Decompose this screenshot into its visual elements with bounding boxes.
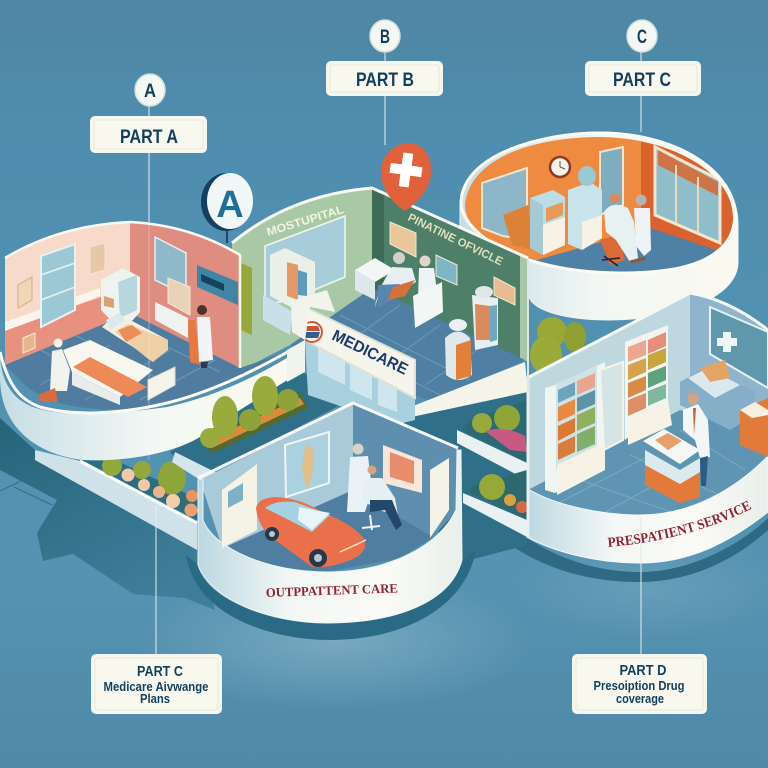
icon: letter A badge (201, 173, 253, 243)
floor (528, 410, 768, 515)
outer white wall band (460, 132, 738, 320)
pictures (18, 243, 105, 353)
back bed (102, 313, 168, 362)
leader line: part D (640, 517, 642, 563)
panel: Part C room (460, 130, 741, 320)
label: Part D: Presoiption Drug (594, 678, 685, 693)
label: Part B (327, 62, 442, 95)
orange drawers (740, 398, 768, 457)
doctor and patient (347, 444, 402, 530)
right wall window (155, 237, 186, 295)
leader line: part A (148, 102, 150, 222)
window with cross (710, 307, 768, 388)
bed/desk (680, 360, 755, 430)
medicine bottle (445, 319, 472, 380)
nurse (38, 338, 70, 402)
top rim (232, 188, 528, 258)
planter: right lower (463, 470, 528, 537)
badge: C (627, 20, 657, 52)
outer shadow (186, 550, 476, 640)
doctor with iv stand (188, 305, 213, 368)
label: Part C Medicare Advantage: PART C (137, 663, 183, 680)
shelf unit (101, 268, 140, 332)
front white wall (407, 362, 528, 418)
leader line: part A through room (148, 222, 150, 460)
leader line: part C lower (155, 505, 157, 655)
icon: letter A badge: A (216, 184, 244, 226)
front bed (63, 340, 175, 405)
ground bed: dark teal area between rooms (170, 372, 527, 562)
left wall (5, 222, 130, 365)
left window (41, 244, 75, 327)
sign text hospital: MOSTUPITAL (265, 204, 345, 239)
shelf unit right (625, 325, 672, 445)
label: Part C Medicare Advantage (92, 655, 221, 713)
pillar (291, 290, 335, 340)
storefront (305, 340, 415, 425)
medicine bottle large cabinet (472, 286, 498, 350)
room label: OUTPPATTENT CARE (266, 580, 398, 600)
planter: central garden (200, 376, 308, 453)
room label: PRESPATIENT SERVICE (608, 500, 752, 547)
inner room (465, 137, 734, 272)
cabinet 1 (530, 190, 565, 255)
front band (0, 350, 300, 460)
label: Part D (573, 655, 706, 713)
leader line: part B (384, 50, 386, 145)
wall edge and rim (5, 222, 240, 368)
planter: lower left strip (35, 450, 200, 550)
door (600, 362, 623, 450)
car (256, 497, 366, 567)
left green wall (232, 188, 372, 375)
wall monitor (168, 278, 190, 315)
label: Part C Medicare Advantage: Medicare Aivwange (104, 679, 208, 694)
left window (482, 168, 527, 240)
medicare logo (302, 322, 322, 342)
icon: orange plus pin (381, 143, 431, 211)
side table (155, 302, 188, 338)
label: Part A: PART A (120, 127, 178, 148)
label: Part C (586, 62, 700, 95)
bush: pharmacy back (530, 317, 586, 374)
label: Part D: PART D (620, 662, 667, 679)
walls top rim (527, 293, 768, 378)
cabinet 2 (568, 166, 602, 250)
white curb (172, 452, 217, 480)
sign text office: PINATINE OFVICLE (406, 212, 505, 268)
badge: B: B (380, 27, 390, 48)
white band (198, 450, 462, 623)
cabinet (263, 248, 315, 335)
floor (290, 288, 525, 402)
right wall (353, 403, 458, 538)
band toward central room (287, 340, 305, 382)
right window (655, 147, 720, 243)
chart on wall (383, 445, 422, 493)
planter: right upper (457, 400, 527, 480)
wall pictures (390, 222, 515, 305)
window behind cabinets (600, 147, 623, 215)
leader line: part C (640, 50, 642, 132)
desk and seated people (355, 252, 443, 328)
door (222, 464, 257, 548)
label: Part C: PART C (613, 70, 671, 91)
window left wall (265, 216, 345, 305)
left wall (200, 403, 353, 550)
label: Part B: PART B (356, 70, 414, 91)
label: Part D: coverage (616, 691, 664, 706)
badge: A (135, 74, 165, 106)
floor (5, 313, 287, 409)
left wall (527, 293, 690, 505)
label: Part C Medicare Advantage: Plans (140, 691, 170, 706)
orange horse picture (503, 205, 534, 250)
panel: prescription service room (526, 294, 768, 564)
shelf unit left (545, 362, 605, 495)
label: Part A (91, 117, 206, 152)
right wall (130, 222, 240, 368)
rim (461, 133, 736, 273)
panel: Part A hospital room (0, 222, 305, 460)
counter (643, 429, 700, 503)
badge: A: A (144, 81, 156, 102)
right green wall (372, 188, 528, 362)
pharmacist (683, 390, 710, 486)
medicare sign: MEDICARE (329, 327, 411, 379)
bush strip: tall hedge (241, 263, 252, 335)
blue sign (197, 265, 238, 305)
badge: B (370, 20, 400, 52)
right wall (690, 293, 768, 460)
panel: outpatient care room (186, 403, 476, 640)
medicare sign (302, 307, 415, 398)
badge: C: C (637, 27, 647, 48)
clock (550, 157, 570, 177)
window with spine picture (285, 432, 329, 497)
patient and doctor (600, 193, 651, 266)
panel: central hospital and office (232, 188, 528, 425)
front wall band (527, 456, 768, 563)
bushes (102, 456, 198, 516)
floor (223, 490, 433, 572)
leader line: part D lower (640, 563, 642, 655)
side door (430, 458, 449, 538)
